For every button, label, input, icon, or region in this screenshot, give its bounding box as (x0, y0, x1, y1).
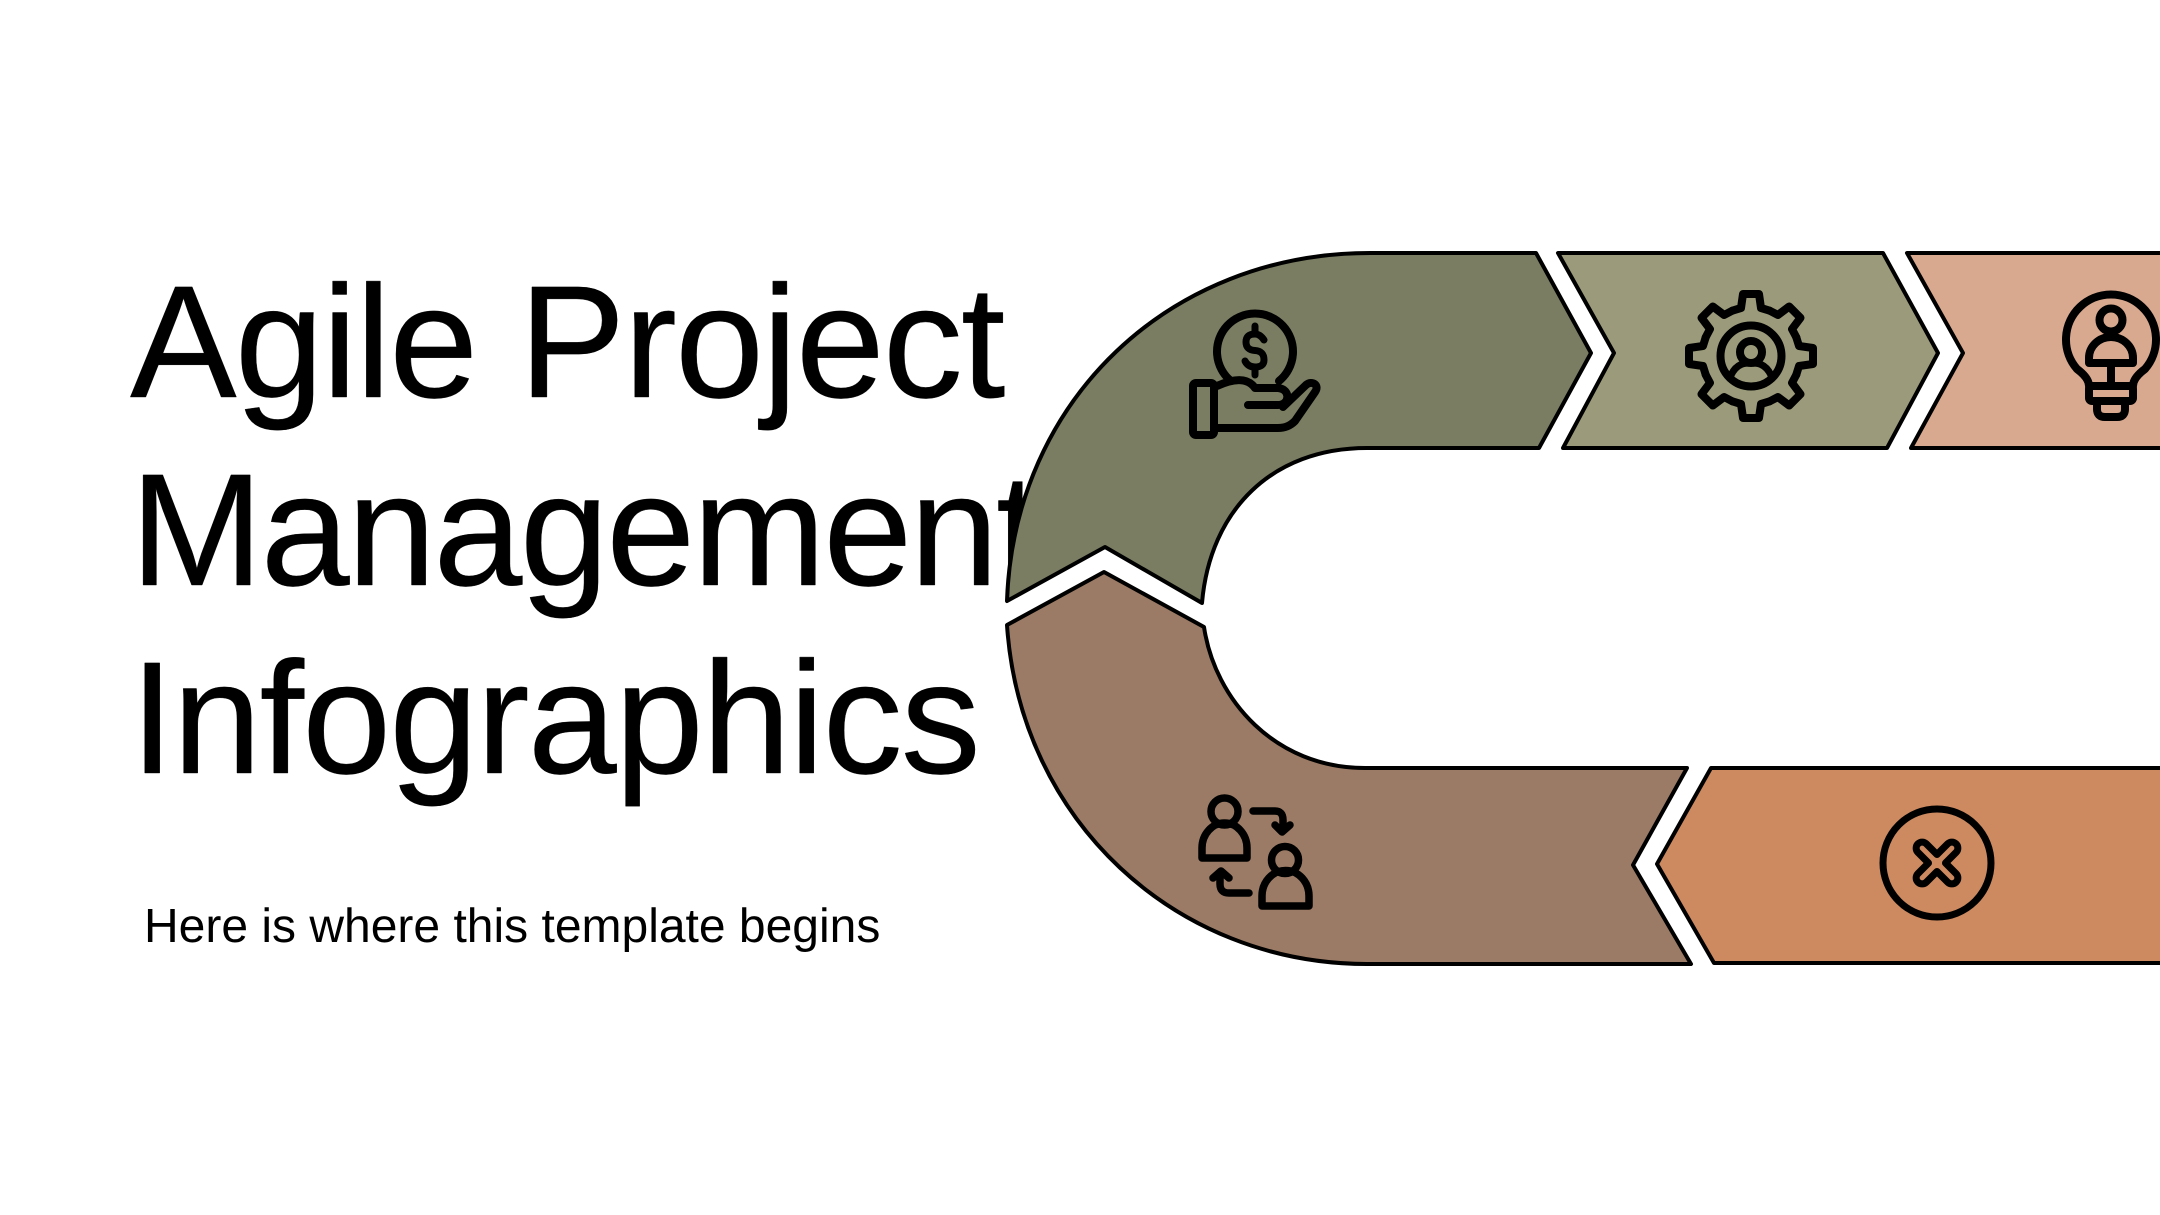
icon: cross in circle (1883, 809, 1991, 917)
step 2: sage chevron segment (1558, 253, 1938, 448)
title (130, 252, 1040, 807)
icon: people exchange (1202, 798, 1309, 906)
title: Management (130, 440, 1040, 619)
icon: gear with person (1689, 294, 1813, 418)
step 5: curved brown arrow segment (1007, 572, 1691, 964)
subtitle: Here is where this template begins (144, 900, 880, 953)
title: Agile Project (130, 252, 1005, 431)
icon: light bulb with person (2066, 295, 2156, 417)
icon: hand holding coin (1193, 314, 1317, 435)
step 3: peach chevron segment (1907, 253, 2160, 448)
step 4: orange chevron segment (1657, 768, 2160, 963)
title: Infographics (130, 628, 979, 807)
step 1: curved olive arrow segment (1007, 253, 1591, 603)
